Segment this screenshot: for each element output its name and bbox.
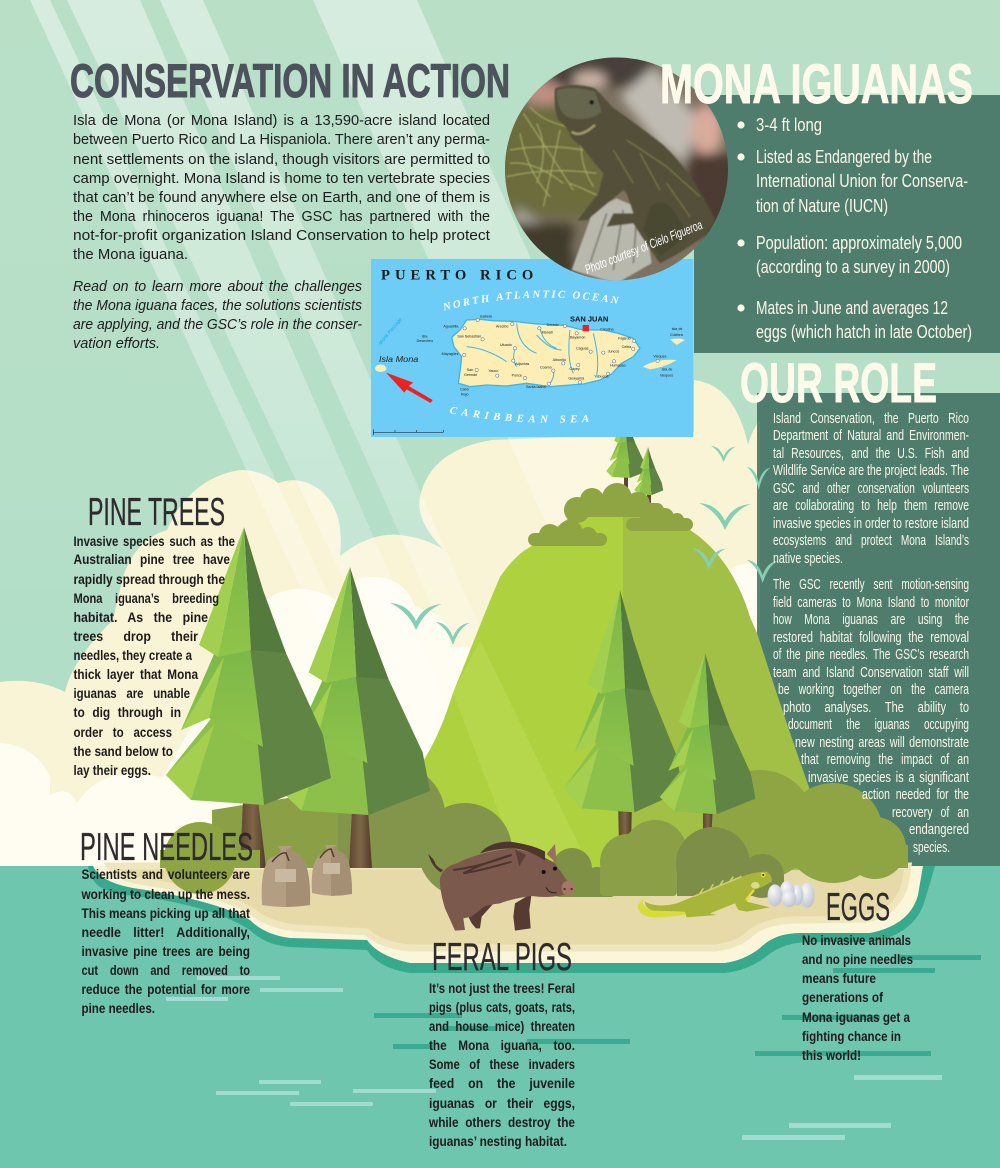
bullet list: 3-4 ft long (756, 114, 822, 135)
background: white cloud (0, 564, 760, 868)
map city markers (463, 318, 659, 385)
map city labels: Guayama (568, 377, 585, 381)
map city labels: Fajardo (618, 336, 631, 340)
photo credit: Photo courtesy of Cielo Figueroa (583, 217, 704, 277)
panel: our role background (757, 393, 1000, 866)
feral pigs body text: the Mona iguana, too. (429, 1037, 575, 1053)
italic paragraph: the Mona iguana faces, the solutions scientists (73, 298, 362, 314)
map city labels (417, 315, 684, 396)
heading: Pine Needles: PINE NEEDLES (80, 826, 253, 869)
map city labels: Cayey (569, 367, 580, 371)
intro paragraph: not-for-profit organization Island Conservation to help protect (73, 228, 490, 244)
map label: San Juan: SAN JUAN (570, 314, 608, 323)
map label: Isla Mona: Isla Mona (379, 354, 419, 364)
map city labels: Adjuntas (515, 362, 529, 366)
panel: Mona iguanas text (660, 52, 973, 342)
map city labels: Isabela (480, 315, 493, 319)
ocean (0, 866, 1000, 1168)
role paragraph two: species. (913, 840, 950, 856)
map city labels: Santa Isabel (526, 385, 546, 389)
feral pigs body text: iguanas or their eggs, (429, 1095, 575, 1111)
map city labels: Juncos (608, 350, 619, 354)
map city labels: Utuado (500, 343, 512, 347)
map city labels: Yauco (488, 369, 498, 373)
feral pigs body text: iguanas’ nesting habitat. (429, 1133, 567, 1149)
intro paragraph: camp overnight. Mona Island is home to ten vertebrate species (73, 171, 490, 187)
icon: burlap sacks (262, 845, 352, 907)
arrow pointing to Isla Mona (386, 373, 433, 403)
bullet list: tion of Nature (IUCN) (756, 195, 888, 216)
island (88, 866, 935, 973)
pine trees body text: Mona iguana’s breeding (74, 590, 219, 606)
map city labels: Aguadilla (443, 324, 459, 328)
pine trees body text: habitat. As the pine (74, 609, 208, 625)
pine trees body text: iguanas are unable (74, 685, 190, 701)
pine trees body text: Invasive species such as the (74, 533, 235, 549)
map city labels: Manatí (542, 330, 553, 334)
pine needles body text: cut down and removed to (82, 962, 250, 978)
map city labels: Vieques (653, 355, 667, 359)
back bushes (212, 765, 908, 897)
intro paragraph: the Mona iguana. (73, 247, 188, 263)
map city labels: Ponce (512, 373, 522, 377)
intro paragraph: Isla de Mona (or Mona Island) is a 13,590-acre island located (73, 113, 490, 129)
map city labels: Yabucoa (594, 375, 609, 379)
panel: our role text (740, 351, 970, 856)
heading: Feral Pigs: FERAL PIGS (432, 936, 572, 979)
feral pigs body text: and house mice) threaten (429, 1018, 575, 1034)
eggs body text: and no pine needles (802, 951, 913, 967)
panel: conservation in action (70, 54, 510, 352)
feral pigs body text: while others destroy the (428, 1114, 575, 1130)
text block: pine needles (80, 826, 253, 1016)
icon: iguana (637, 872, 772, 917)
map city labels: Caguas (576, 346, 589, 350)
map sea label: CARIBBEAN SEA (450, 407, 589, 423)
map city labels: San Sebastián (457, 335, 481, 339)
background: cream cloud (0, 380, 760, 868)
pine needles body text: working to clean up the mess. (81, 886, 250, 902)
water ripple lines (166, 955, 981, 1140)
map city labels: Humacao (610, 363, 626, 367)
intro paragraph: the Mona rhinoceros iguana! The GSC has partnered with the (73, 209, 490, 225)
text block: eggs (802, 886, 913, 1063)
background: light beams (30, 0, 760, 860)
pine trees body text: Australian pine tree have (74, 551, 230, 567)
pine trees body text (74, 533, 235, 778)
icon: feral pig (428, 842, 575, 931)
summit bushes (528, 483, 693, 546)
map city labels: Isla (422, 334, 428, 338)
map city labels: Carolina (600, 328, 615, 332)
pine needles body text: invasive pine trees are being (82, 943, 250, 959)
map ocean label: NORTH ATLANTIC OCEAN (443, 290, 620, 311)
map city labels: Ceiba (622, 345, 632, 349)
italic paragraph: Read on to learn more about the challenges (73, 279, 362, 295)
eggs body text: generations of (802, 989, 883, 1005)
pine trees body text: trees drop their (74, 628, 198, 644)
role paragraph one (773, 411, 969, 567)
map passage label: Mona Passage (378, 317, 404, 346)
map city labels: Bayamón (570, 335, 585, 339)
map city labels: Cabo (460, 388, 469, 392)
map city labels: Germán (464, 373, 477, 377)
text block: pine trees (74, 491, 235, 778)
role paragraph one: native species. (773, 551, 843, 567)
role paragraph two (773, 577, 970, 856)
map city labels: Coamo (540, 365, 552, 369)
pine needles body text: This means picking up all that (82, 905, 250, 921)
pine needles body text: reduce the potential for more (82, 981, 250, 997)
icon: San Juan marker (583, 325, 589, 331)
role paragraph two: recovery of an (892, 805, 969, 821)
role paragraph two: endangered (909, 822, 969, 838)
pine needles body text: Scientists and volunteers are (82, 866, 250, 882)
background: sky (0, 0, 1000, 870)
italic paragraph (73, 279, 362, 352)
pine trees body text: rapidly spread through the (74, 571, 225, 587)
pine trees body text: to dig through in (74, 704, 181, 720)
pine trees body text: lay their eggs. (74, 762, 151, 778)
pine trees body text: needles, they create a (74, 647, 192, 663)
map scale bar (373, 429, 443, 435)
pine needles body text (81, 866, 250, 1016)
feral pigs body text: pigs (plus cats, goats, rats, (429, 999, 575, 1015)
map title: PUERTO RICO (381, 267, 533, 283)
eggs body text: means future (802, 970, 876, 986)
map city labels: Culebra (670, 333, 684, 337)
pine trees (166, 527, 755, 868)
map city labels: Rojo (461, 392, 469, 396)
bullet list (737, 114, 972, 342)
mountain (422, 517, 830, 870)
feral pigs body text: Some of these invaders (429, 1056, 575, 1072)
map city labels: Mayagüez (442, 352, 459, 356)
eggs body text: fighting chance in (802, 1028, 901, 1044)
heading: Pine Trees: PINE TREES (88, 491, 225, 534)
map island of Puerto Rico (452, 319, 640, 387)
map city labels: Isla de (672, 327, 682, 331)
italic paragraph: vation efforts. (73, 336, 160, 352)
intro paragraph: that can’t be found anywhere else on Earth, and one of them is (73, 190, 490, 206)
map city labels: Desecheo (417, 339, 433, 343)
title: CONSERVATION IN ACTION (70, 54, 510, 107)
pine trees body text: the sand below to (74, 743, 173, 759)
icon: eggs (768, 881, 815, 908)
feral pigs body text: feed on the juvenile (429, 1075, 575, 1091)
summit trees (606, 413, 663, 506)
text block: feral pigs (428, 936, 575, 1149)
panel: Mona iguanas background (694, 95, 1000, 353)
pine trees body text: order to access (74, 724, 172, 740)
pine needles body text: pine needles. (82, 1000, 155, 1016)
heading: Eggs: EGGS (826, 886, 890, 929)
italic paragraph: are applying, and the GSC’s role in the conser- (73, 317, 362, 333)
map city labels: San (467, 368, 473, 372)
pine trees body text: thick layer that Mona (74, 666, 198, 682)
map city labels: Dorado (547, 323, 559, 327)
eggs body text (802, 932, 913, 1063)
map: Puerto Rico (371, 259, 694, 437)
map city labels: Isla de (662, 368, 672, 372)
bullet list: Listed as Endangered by the (756, 146, 932, 167)
feral pigs body text (428, 980, 575, 1149)
birds (390, 446, 778, 645)
intro paragraph (73, 113, 490, 263)
feral pigs body text: It’s not just the trees! Feral (429, 980, 575, 996)
map city labels: Vieques (660, 374, 673, 378)
map city labels: Arecibo (496, 324, 508, 328)
front bushes (160, 820, 784, 901)
photo: Mona iguana on a log (505, 58, 728, 280)
pine needles body text: needle litter! Additionally, (82, 924, 250, 940)
eggs body text: Mona iguanas get a (802, 1009, 910, 1025)
intro paragraph: between Puerto Rico and La Hispaniola. There aren’t any perma- (73, 132, 490, 148)
eggs body text: this world! (802, 1047, 861, 1063)
map city labels: Aibonito (553, 358, 566, 362)
eggs body text: No invasive animals (802, 932, 911, 948)
intro paragraph: nent settlements on the island, though visitors are permitted to (73, 152, 490, 168)
